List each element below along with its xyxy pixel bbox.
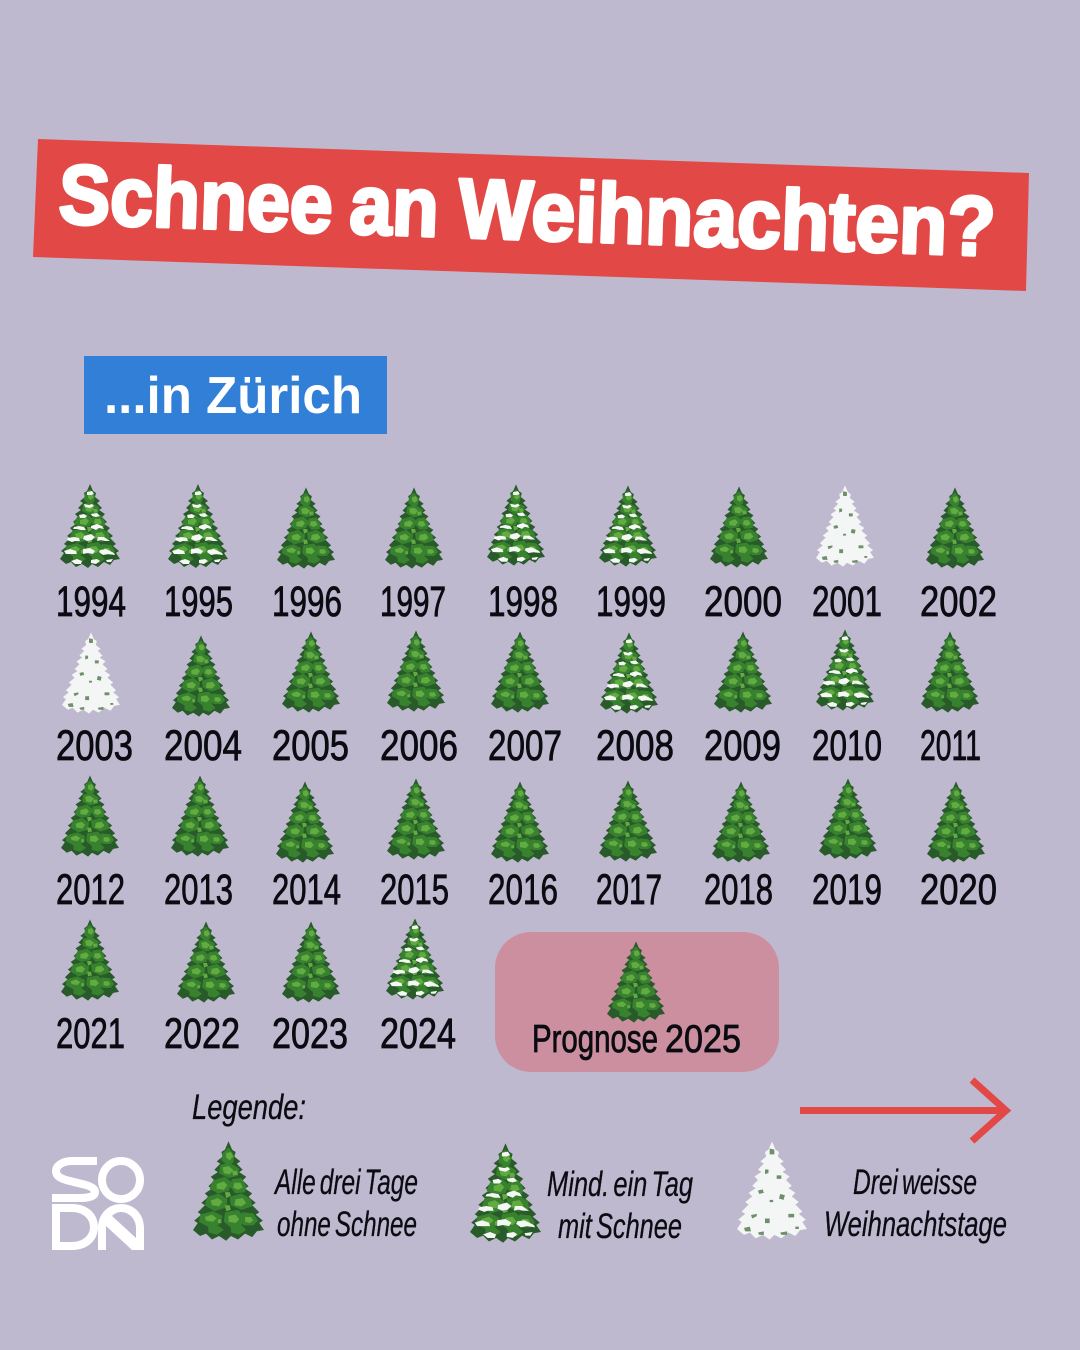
legend: all three days without snow: ohne Schnee xyxy=(277,1205,417,1244)
year 2017 xyxy=(596,780,662,914)
year 1999 xyxy=(596,485,666,626)
year 2000 xyxy=(704,486,782,626)
year 1995: 1995 xyxy=(164,578,233,626)
year 2015: 2015 xyxy=(380,866,449,914)
year 2016 xyxy=(488,781,558,914)
year 2011 xyxy=(920,631,981,770)
logo: SODA xyxy=(52,1161,144,1250)
year 2020 xyxy=(920,781,997,914)
year 2014: 2014 xyxy=(272,866,341,914)
year 2009: 2009 xyxy=(704,722,781,770)
year 1994: 1994 xyxy=(56,578,126,626)
forecast panel: Prognose 2025 xyxy=(495,932,779,1072)
subtitle: in Zürich: ...in Zürich xyxy=(104,367,362,425)
legend: three white Christmas days: Drei weisse xyxy=(853,1163,977,1202)
title banner: Weihnachten? xyxy=(457,161,997,274)
year 2008: 2008 xyxy=(596,722,674,770)
year 2023 xyxy=(272,921,348,1058)
title banner: an xyxy=(348,157,440,254)
year 2006: 2006 xyxy=(380,722,458,770)
year 2007: 2007 xyxy=(488,722,562,770)
year 2019: 2019 xyxy=(812,866,882,914)
year 2009 xyxy=(704,631,781,770)
year 2002 xyxy=(920,487,997,626)
year 1998 xyxy=(487,484,558,626)
year 2008 xyxy=(596,632,674,770)
year 1995 xyxy=(164,484,233,626)
year 2011: 2011 xyxy=(920,722,981,770)
year 2005 xyxy=(272,631,349,770)
year 2015 xyxy=(380,778,449,914)
year 2022 xyxy=(164,921,240,1058)
year 2005: 2005 xyxy=(272,722,349,770)
arrow xyxy=(800,1080,1006,1141)
year 2006 xyxy=(380,630,458,770)
year 1996 xyxy=(272,487,342,626)
legend: at least one day with snow: Mind. ein Tag xyxy=(547,1165,693,1204)
year 2001: 2001 xyxy=(812,578,882,626)
year 1997: 1997 xyxy=(380,578,446,626)
year 2004 xyxy=(164,635,242,770)
year 2010 xyxy=(812,629,882,770)
legend: at least one day with snow: mit Schnee xyxy=(558,1207,682,1246)
year 1994 xyxy=(56,484,126,626)
year 2000: 2000 xyxy=(704,578,782,626)
year 2022: 2022 xyxy=(164,1010,240,1058)
legend: at least one day with snow xyxy=(470,1143,693,1246)
year 2023: 2023 xyxy=(272,1010,348,1058)
year 1996: 1996 xyxy=(272,578,342,626)
year 2021: 2021 xyxy=(56,1010,125,1058)
legend heading: Legende: xyxy=(192,1088,306,1127)
legend: all three days without snow: Alle drei Tage xyxy=(274,1163,418,1202)
year 2018 xyxy=(704,781,773,914)
year 2018: 2018 xyxy=(704,866,773,914)
year 2002: 2002 xyxy=(920,578,997,626)
year 2013 xyxy=(164,775,233,914)
year 2003: 2003 xyxy=(56,722,133,770)
year 2024: 2024 xyxy=(380,1010,456,1058)
year 2021 xyxy=(56,919,125,1058)
year 2013: 2013 xyxy=(164,866,233,914)
title banner xyxy=(33,139,1029,291)
year 2016: 2016 xyxy=(488,866,558,914)
year 2012 xyxy=(56,775,125,914)
subtitle: in Zürich xyxy=(84,356,387,434)
year 2019 xyxy=(812,778,882,914)
year 2020: 2020 xyxy=(920,866,997,914)
year 2024 xyxy=(380,918,456,1058)
year 1997 xyxy=(380,487,446,626)
legend: three white Christmas days: Weihnachtstage xyxy=(824,1205,1007,1244)
year 2003 xyxy=(56,632,133,770)
year 2010: 2010 xyxy=(812,722,882,770)
year 2001 xyxy=(812,485,882,626)
forecast panel: Prognose 2025: Prognose xyxy=(532,1018,658,1061)
year 2004: 2004 xyxy=(164,722,242,770)
year 2014 xyxy=(272,781,341,914)
forecast panel: Prognose 2025: 2025 xyxy=(665,1018,741,1061)
year 2017: 2017 xyxy=(596,866,662,914)
legend: all three days without snow xyxy=(193,1141,418,1244)
year 2007 xyxy=(488,631,562,770)
year 1999: 1999 xyxy=(596,578,666,626)
year 2012: 2012 xyxy=(56,866,125,914)
legend: three white Christmas days xyxy=(737,1142,1007,1244)
title banner: Schnee xyxy=(57,147,334,251)
year 1998: 1998 xyxy=(488,578,558,626)
